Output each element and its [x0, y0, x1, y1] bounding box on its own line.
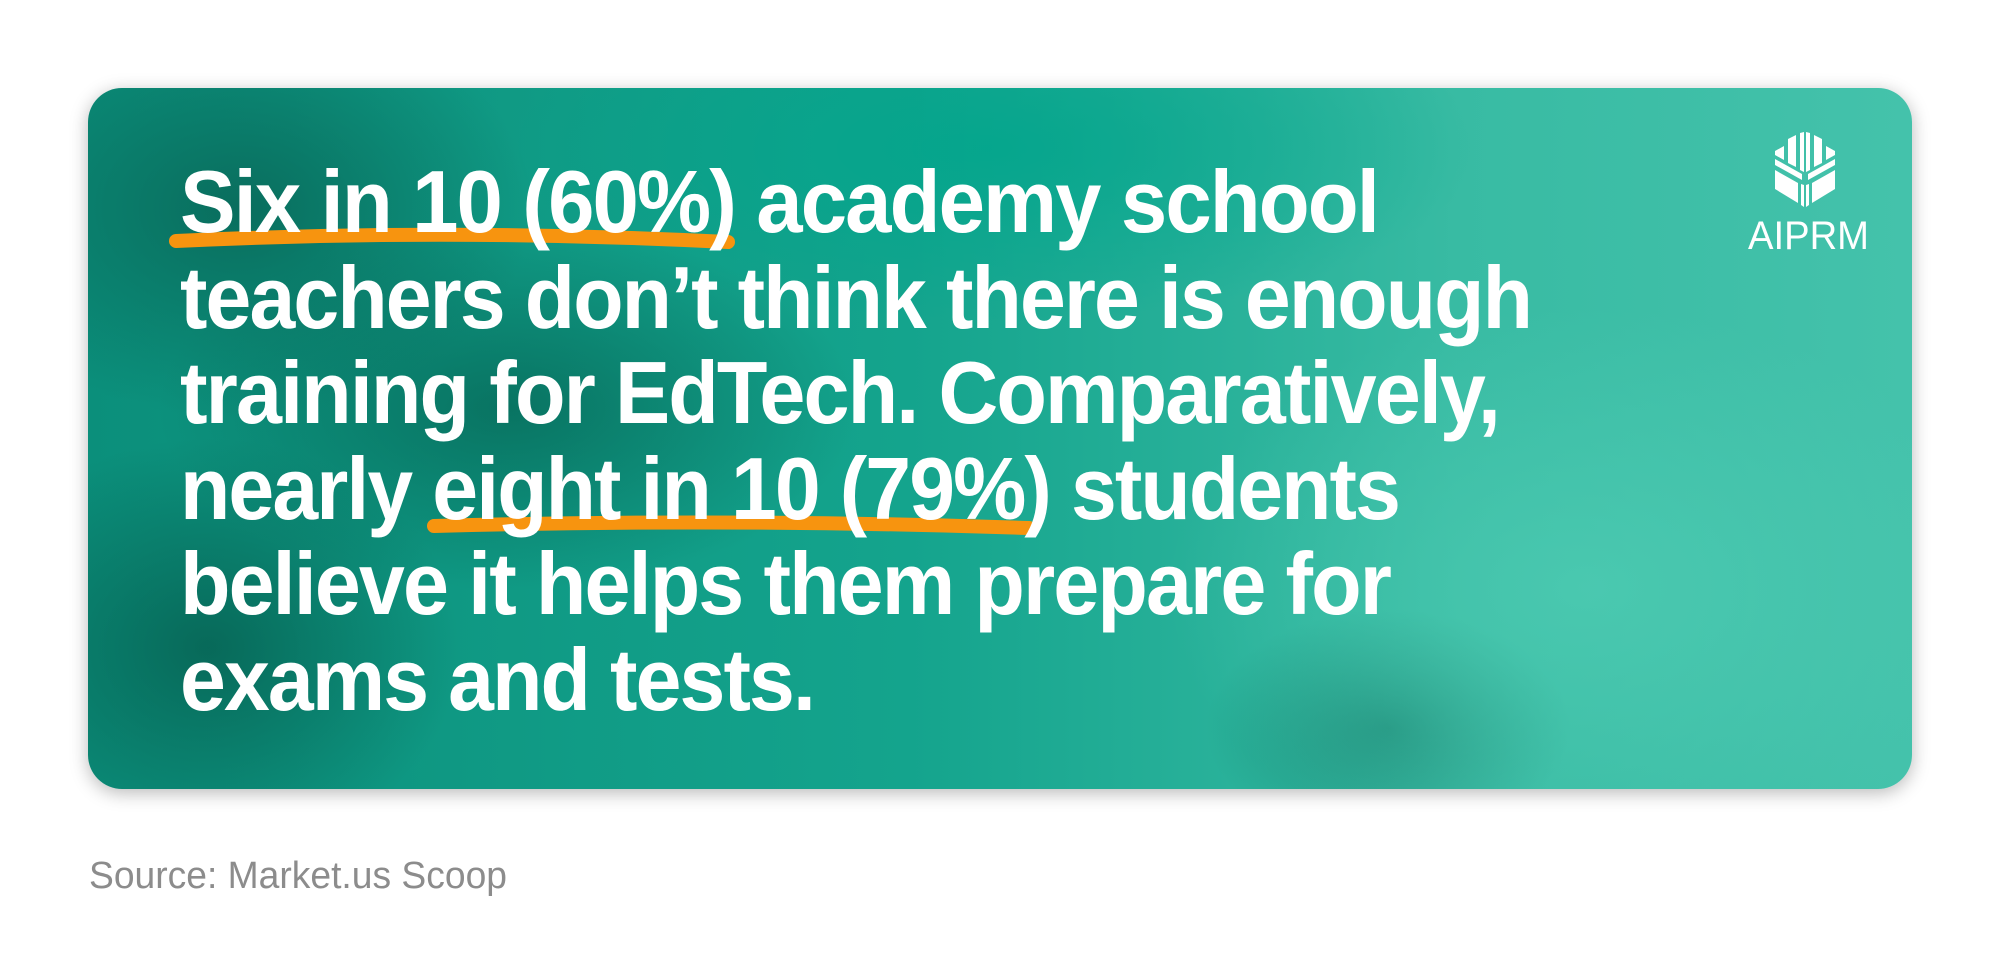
- underline: six in 10: [176, 235, 728, 242]
- source note: Source: Market.us Scoop: [89, 855, 507, 897]
- icon: hexagon mark: [1775, 132, 1835, 207]
- panel: main card: [88, 88, 1912, 789]
- text lines: nearly eight in 10 (79%) students: [180, 439, 1399, 538]
- text lines: teachers don’t think there is enough: [180, 248, 1531, 347]
- text lines: [180, 152, 1531, 729]
- underline: eight in 10: [434, 522, 1029, 528]
- text lines: exams and tests.: [180, 630, 814, 729]
- logo text: AIPRM: [1748, 214, 1869, 258]
- logo: AIPRM: [1748, 132, 1869, 258]
- text lines: believe it helps them prepare for: [180, 534, 1391, 633]
- text lines: training for EdTech. Comparatively,: [180, 343, 1499, 442]
- text lines: Six in 10 (60%) academy school: [180, 152, 1378, 251]
